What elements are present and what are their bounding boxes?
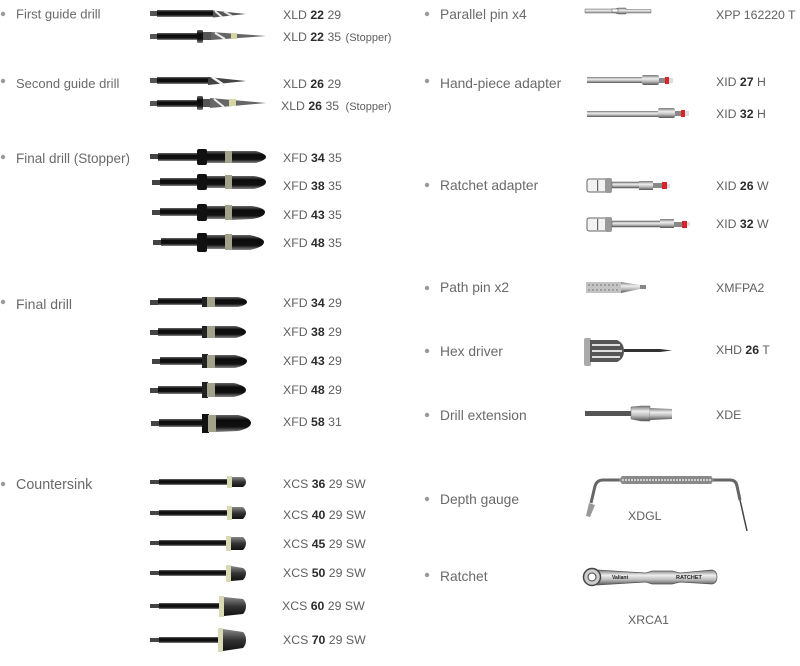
icon: ratchet: Valiant — [612, 575, 628, 581]
icon: XFD 48 35 — [153, 233, 264, 252]
icon: XCS 60 29 SW — [150, 596, 246, 617]
code: XLD 22 29: XLD 22 29 — [283, 8, 341, 22]
code: XCS 50 29 SW: XCS 50 29 SW — [283, 566, 366, 580]
icon: XFD 48 29 — [150, 382, 246, 398]
icon: XFD 34 35 — [150, 149, 266, 165]
item: countersink label: Countersink — [16, 477, 93, 493]
icon: XCS 36 29 SW — [150, 476, 246, 488]
item: first guide drill label: First guide drill — [16, 6, 101, 22]
item: second guide drill label: Second guide drill — [16, 76, 119, 91]
icon: XLD 22 35 drill — [150, 30, 266, 43]
code: XFD 38 29: XFD 38 29 — [283, 325, 342, 339]
icon: XCS 50 29 SW — [150, 565, 246, 582]
icon: drill extension — [585, 406, 672, 421]
code: XID 26 W: XID 26 W — [716, 179, 769, 193]
icon: depth gauge — [586, 476, 747, 531]
code: XCS 36 29 SW: XCS 36 29 SW — [283, 477, 366, 491]
icon: XID 27 H — [587, 75, 673, 85]
icon: path pin — [586, 282, 646, 293]
icon: XLD 22 29 drill — [150, 10, 246, 18]
code: XFD 48 29: XFD 48 29 — [283, 383, 342, 397]
code: XFD 43 35: XFD 43 35 — [283, 208, 342, 222]
code: XID 32 H: XID 32 H — [716, 107, 766, 121]
code: XFD 58 31: XFD 58 31 — [283, 415, 342, 429]
code: XID 32 W: XID 32 W — [716, 217, 769, 231]
item: final drill label: Final drill — [16, 296, 72, 312]
code: XCS 60 29 SW: XCS 60 29 SW — [282, 599, 365, 613]
icon: XFD 34 29 — [150, 297, 247, 307]
icon: XCS 70 29 SW — [150, 628, 246, 652]
code: XLD 22 35 (Stopper): XLD 22 35 (Stopper) — [283, 30, 391, 44]
code: XFD 34 35: XFD 34 35 — [283, 151, 342, 165]
icon: XID 32 W — [587, 217, 690, 232]
icon: XCS 40 29 SW — [150, 506, 246, 520]
item: ratchet adapter label: Ratchet adapter — [440, 178, 539, 193]
icon: XFD 43 35 — [152, 204, 265, 221]
code: XLD 26 35 (Stopper): XLD 26 35 (Stopper) — [281, 99, 391, 113]
icon: XID 32 H — [587, 108, 689, 118]
item: path pin label: Path pin x2 — [440, 280, 509, 295]
item: final drill stopper label: Final drill (Stopper) — [16, 151, 130, 166]
icon: XFD 43 29 — [152, 354, 247, 368]
icon: XID 26 W — [587, 178, 670, 193]
code: XFD 38 35: XFD 38 35 — [283, 179, 342, 193]
icon: parallel pin — [585, 8, 651, 14]
code: XDGL: XDGL — [628, 509, 662, 523]
code: XRCA1: XRCA1 — [628, 613, 669, 627]
code: XMFPA2: XMFPA2 — [716, 281, 764, 295]
code: XFD 43 29: XFD 43 29 — [283, 354, 342, 368]
code: XHD 26 T: XHD 26 T — [716, 343, 770, 357]
code: XCS 40 29 SW: XCS 40 29 SW — [283, 508, 366, 522]
item: ratchet label: Ratchet — [440, 569, 488, 584]
code: XCS 45 29 SW: XCS 45 29 SW — [283, 537, 366, 551]
icon: ratchet: RATCHET — [676, 575, 703, 581]
icon: XFD 58 31 — [151, 414, 251, 433]
icon: XLD 26 29 drill — [150, 77, 246, 85]
item: parallel pin label: Parallel pin x4 — [440, 7, 527, 22]
icon: XCS 45 29 SW — [150, 536, 246, 551]
icon: XFD 38 29 — [150, 326, 246, 338]
code: XDE: XDE — [716, 408, 741, 422]
icon: XFD 38 35 — [152, 174, 266, 190]
code: XLD 26 29: XLD 26 29 — [283, 77, 341, 91]
code: XPP 162220 T: XPP 162220 T — [716, 8, 796, 22]
item: hand-piece adapter label: Hand-piece adapter — [440, 76, 562, 91]
item: hex driver label: Hex driver — [440, 344, 503, 359]
icon: ratchet — [584, 568, 717, 586]
item: depth gauge label: Depth gauge — [440, 492, 519, 507]
icon: XLD 26 35 drill — [150, 96, 266, 110]
code: XFD 34 29: XFD 34 29 — [283, 296, 342, 310]
code: XID 27 H: XID 27 H — [716, 75, 766, 89]
code: XCS 70 29 SW: XCS 70 29 SW — [283, 633, 366, 647]
item: drill extension label: Drill extension — [440, 408, 527, 423]
code: XFD 48 35: XFD 48 35 — [283, 236, 342, 250]
icon: hex driver — [584, 338, 672, 366]
